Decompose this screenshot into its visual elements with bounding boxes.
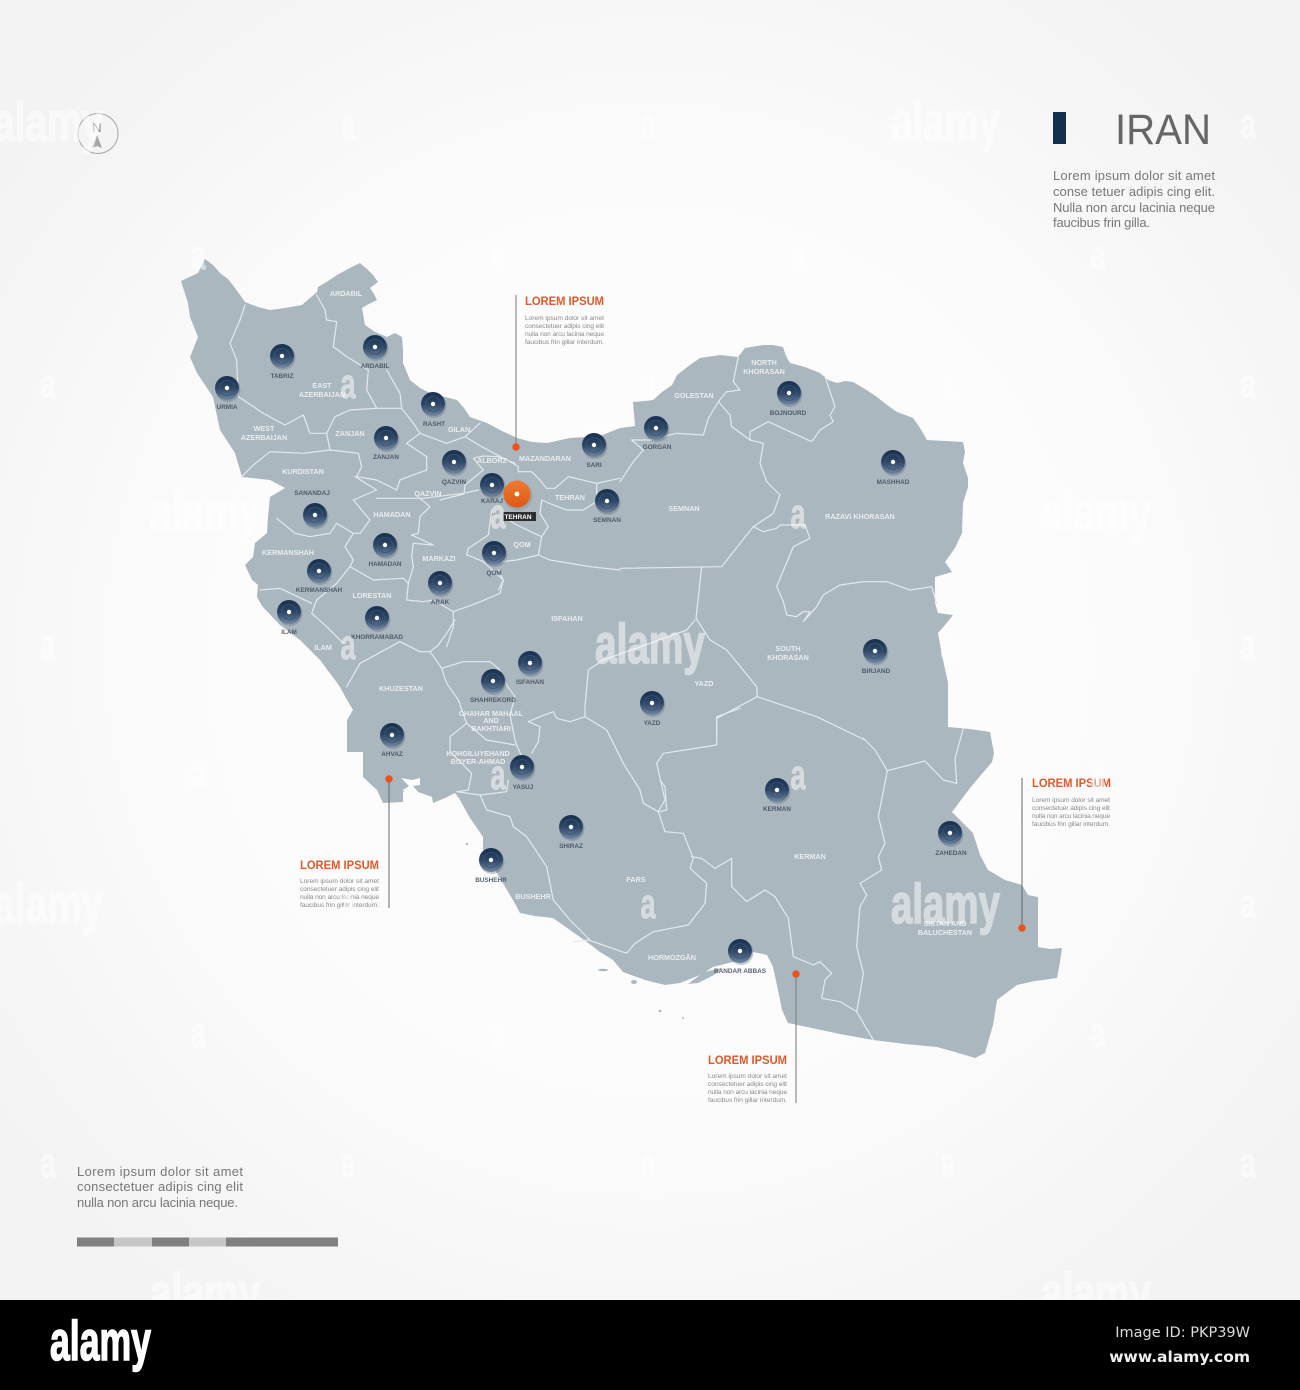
watermark layer: a — [940, 621, 956, 668]
callout: south: Lorem ipsum dolor sit amet — [708, 1073, 787, 1080]
province labels: LORESTAN — [352, 591, 392, 600]
intro text: Lorem ipsum dolor sit amet — [1053, 168, 1215, 183]
province labels: WEST — [254, 424, 275, 433]
province labels: BALUCHESTAN — [918, 928, 972, 937]
intro text: faucibus frin gilla. — [1053, 215, 1150, 230]
city labels — [217, 363, 967, 975]
callout: south-east: faucibus frin gillar interdum. — [1032, 821, 1110, 828]
watermark layer: a — [190, 1009, 206, 1056]
province labels: GOLESTAN — [674, 391, 714, 400]
province labels: AZERBAIJAN — [241, 433, 287, 442]
province labels: HAMADAN — [373, 510, 411, 519]
province labels: RAZAVI KHORASAN — [825, 512, 895, 521]
watermark layer: a — [940, 1139, 956, 1186]
title: IRAN — [1115, 106, 1211, 154]
city labels: ISFAHAN — [516, 679, 544, 686]
callout: south-west — [300, 775, 393, 909]
watermark layer: a — [340, 360, 356, 407]
callout: north: LOREM IPSUM — [525, 294, 604, 308]
province labels: TEHRAN — [555, 493, 585, 502]
bottom-left text: nulla non arcu lacinia neque. — [77, 1195, 238, 1210]
city labels: BOJNOURD — [770, 410, 807, 417]
watermark layer: a — [1240, 621, 1256, 668]
province labels: MAZANDARAN — [519, 454, 571, 463]
watermark layer: a — [1090, 751, 1106, 798]
city labels: HAMADAN — [368, 561, 402, 568]
watermark layer: a — [1240, 880, 1256, 927]
watermark layer: a — [640, 880, 656, 927]
watermark layer: alamy — [891, 90, 1000, 153]
callout: south — [708, 970, 800, 1104]
province labels: BUSHEHR — [515, 892, 552, 901]
watermark layer: a — [790, 231, 806, 278]
intro text: Nulla non arcu lacinia neque — [1053, 200, 1215, 215]
city labels: ZAHEDAN — [935, 850, 967, 857]
image id: Image ID: PKP39W — [1115, 1325, 1250, 1341]
footer band — [0, 1300, 1300, 1390]
province labels: CHAHAR MAHAAL — [459, 709, 524, 718]
watermark layer: a — [1090, 231, 1106, 278]
province labels: KHORASAN — [767, 653, 809, 662]
province labels: YAZD — [695, 679, 713, 688]
city labels: AHVAZ — [381, 751, 403, 758]
watermark layer: a — [40, 1139, 56, 1186]
islands — [466, 843, 722, 1019]
city labels: GORGAN — [643, 444, 672, 451]
watermark layer: a — [490, 231, 506, 278]
province labels: KERMAN — [794, 852, 826, 861]
city labels: ILAM — [281, 629, 297, 636]
city labels: YAZD — [644, 720, 661, 727]
watermark layer: a — [490, 490, 506, 537]
province labels: QAZVIN — [414, 489, 442, 498]
province labels: SISTAN AND — [923, 919, 967, 928]
callout: south-west: faucibus frin gillar interdum. — [300, 902, 379, 909]
bottom-left text: Lorem ipsum dolor sit amet — [77, 1164, 243, 1179]
callout: south-west: LOREM IPSUM — [300, 858, 379, 872]
watermark layer: alamy — [1041, 1261, 1151, 1324]
callout: south: LOREM IPSUM — [708, 1053, 787, 1067]
city labels: BUSHEHR — [475, 877, 507, 884]
callout: north: Lorem ipsum dolor sit amet — [525, 315, 604, 322]
callout: south-east — [1018, 776, 1111, 932]
province labels: EAST — [312, 381, 332, 390]
callout: north: consectetuer adipis cing elit — [525, 323, 604, 330]
province labels: KURDISTAN — [282, 467, 324, 476]
watermark layer: a — [640, 100, 656, 147]
watermark layer: a — [340, 621, 356, 668]
callout: south-east: consectetuer adipis cing elit — [1032, 805, 1110, 812]
watermark layer: a — [340, 880, 356, 927]
watermark layer: alamy — [891, 872, 1000, 935]
province labels: KHORASAN — [743, 367, 785, 376]
bottom-left text — [77, 1164, 243, 1210]
country shape — [181, 259, 1062, 1058]
bottom-left text: consectetuer adipis cing elit — [77, 1179, 243, 1194]
website: www.alamy.com — [1109, 1348, 1250, 1366]
province labels: KHUZESTAN — [379, 684, 423, 693]
callout: south: consectetuer adipis cing elit — [708, 1081, 787, 1088]
province labels: ALBORZ — [477, 456, 508, 465]
footer logo: alamy — [50, 1309, 151, 1372]
city labels: TABRIZ — [271, 373, 294, 380]
watermark layer: a — [190, 751, 206, 798]
watermark layer: a — [490, 751, 506, 798]
callout: south: faucibus frin gillar interdum. — [708, 1097, 787, 1104]
watermark layer: a — [1090, 1009, 1106, 1056]
watermark layer: a — [340, 1139, 356, 1186]
province labels: GILAN — [448, 425, 470, 434]
province labels: ZANJAN — [335, 429, 365, 438]
province labels: KOHGILUYEHAND — [446, 749, 510, 758]
province labels: MARKAZI — [422, 554, 456, 563]
compass — [78, 114, 118, 154]
city labels: KARAJ — [481, 498, 503, 505]
watermark layer: a — [1240, 1139, 1256, 1186]
city labels: YASUJ — [513, 784, 534, 791]
intro text: conse tetuer adipis cing elit. — [1053, 184, 1215, 199]
Tehran area borders — [440, 437, 620, 590]
title block — [1053, 106, 1215, 230]
city labels: BIRJAND — [862, 668, 891, 675]
province labels: QOM — [513, 540, 531, 549]
callout: south-east: LOREM IPSUM — [1032, 776, 1111, 790]
watermark layer: a — [190, 231, 206, 278]
intro text — [1053, 168, 1215, 230]
watermark layer: a — [1240, 100, 1256, 147]
city labels: KERMANSHAH — [296, 587, 342, 594]
watermark layer: a — [940, 360, 956, 407]
callout: south-east: nulla non arcu lacinia neque — [1032, 813, 1110, 820]
province labels: ARDABIL — [330, 289, 363, 298]
city labels: ZANJAN — [373, 454, 399, 461]
province labels: AZERBAIJAN — [299, 390, 345, 399]
city labels: KERMAN — [763, 806, 791, 813]
compass: N — [92, 120, 102, 135]
city labels: SANANDAJ — [294, 490, 330, 497]
city labels: RASHT — [423, 421, 445, 428]
callout: north: nulla non arcu lacinia neque — [525, 331, 604, 338]
province borders — [230, 295, 503, 647]
city markers — [215, 335, 964, 965]
city labels: BANDAR ABBAS — [714, 968, 767, 975]
callout: south: nulla non arcu lacinia neque — [708, 1089, 787, 1096]
callout: south-east: Lorem ipsum dolor sit amet — [1032, 797, 1110, 804]
province labels: SEMNAN — [668, 504, 700, 513]
city labels: SEMNAN — [593, 517, 621, 524]
watermark layer: a — [790, 751, 806, 798]
city labels: ARAK — [431, 599, 450, 606]
watermark layer: a — [1240, 360, 1256, 407]
province labels: AND — [483, 716, 499, 725]
callout: south-west: nulla non arcu lacinia neque — [300, 894, 379, 901]
province labels: KERMANSHAH — [262, 548, 314, 557]
province labels: ISFAHAN — [551, 614, 583, 623]
province labels: SOUTH — [775, 644, 801, 653]
coastal inlet — [401, 778, 420, 795]
Iran map — [181, 259, 1062, 1058]
city labels: QAZVIN — [442, 479, 466, 486]
callout: south-west: Lorem ipsum dolor sit amet — [300, 878, 379, 885]
province labels: HORMOZGĀN — [648, 953, 696, 962]
province labels: BOYER-AHMAD — [451, 757, 505, 766]
city labels: SARI — [586, 462, 602, 469]
city labels: KHORRAMABAD — [351, 634, 403, 641]
watermark layer: alamy — [1041, 480, 1151, 543]
callout: south-west: consectetuer adipis cing elit — [300, 886, 379, 893]
province labels: NORTH — [751, 358, 777, 367]
province labels: BAKHTIARI — [471, 724, 511, 733]
callout: north: faucibus frin gillar interdum. — [525, 339, 604, 346]
scale bar — [77, 1238, 338, 1246]
capital marker: Tehran: TEHRAN — [504, 514, 532, 521]
city labels: SHAHREKORD — [470, 697, 516, 704]
capital marker: Tehran — [503, 480, 536, 521]
watermark layer: a — [340, 100, 356, 147]
watermark layer: a — [490, 1009, 506, 1056]
watermark layer: a — [640, 360, 656, 407]
watermark layer: a — [640, 1139, 656, 1186]
city labels: SHIRAZ — [559, 843, 583, 850]
province labels: ILAM — [314, 643, 332, 652]
city labels: URMIA — [217, 404, 238, 411]
watermark layer: alamy — [150, 480, 260, 543]
watermark layer: a — [790, 490, 806, 537]
watermark layer: a — [40, 621, 56, 668]
watermark layer: a — [40, 360, 56, 407]
callout: north — [512, 294, 604, 451]
watermark layer: alamy — [150, 1261, 260, 1324]
city labels: QOM — [486, 570, 502, 577]
province labels: FARS — [626, 875, 646, 884]
title accent bar — [1053, 112, 1066, 144]
city labels: ARDABIL — [361, 363, 389, 370]
watermark layer: alamy — [595, 612, 705, 675]
city labels: MASHHAD — [877, 479, 910, 486]
province labels — [241, 289, 972, 962]
